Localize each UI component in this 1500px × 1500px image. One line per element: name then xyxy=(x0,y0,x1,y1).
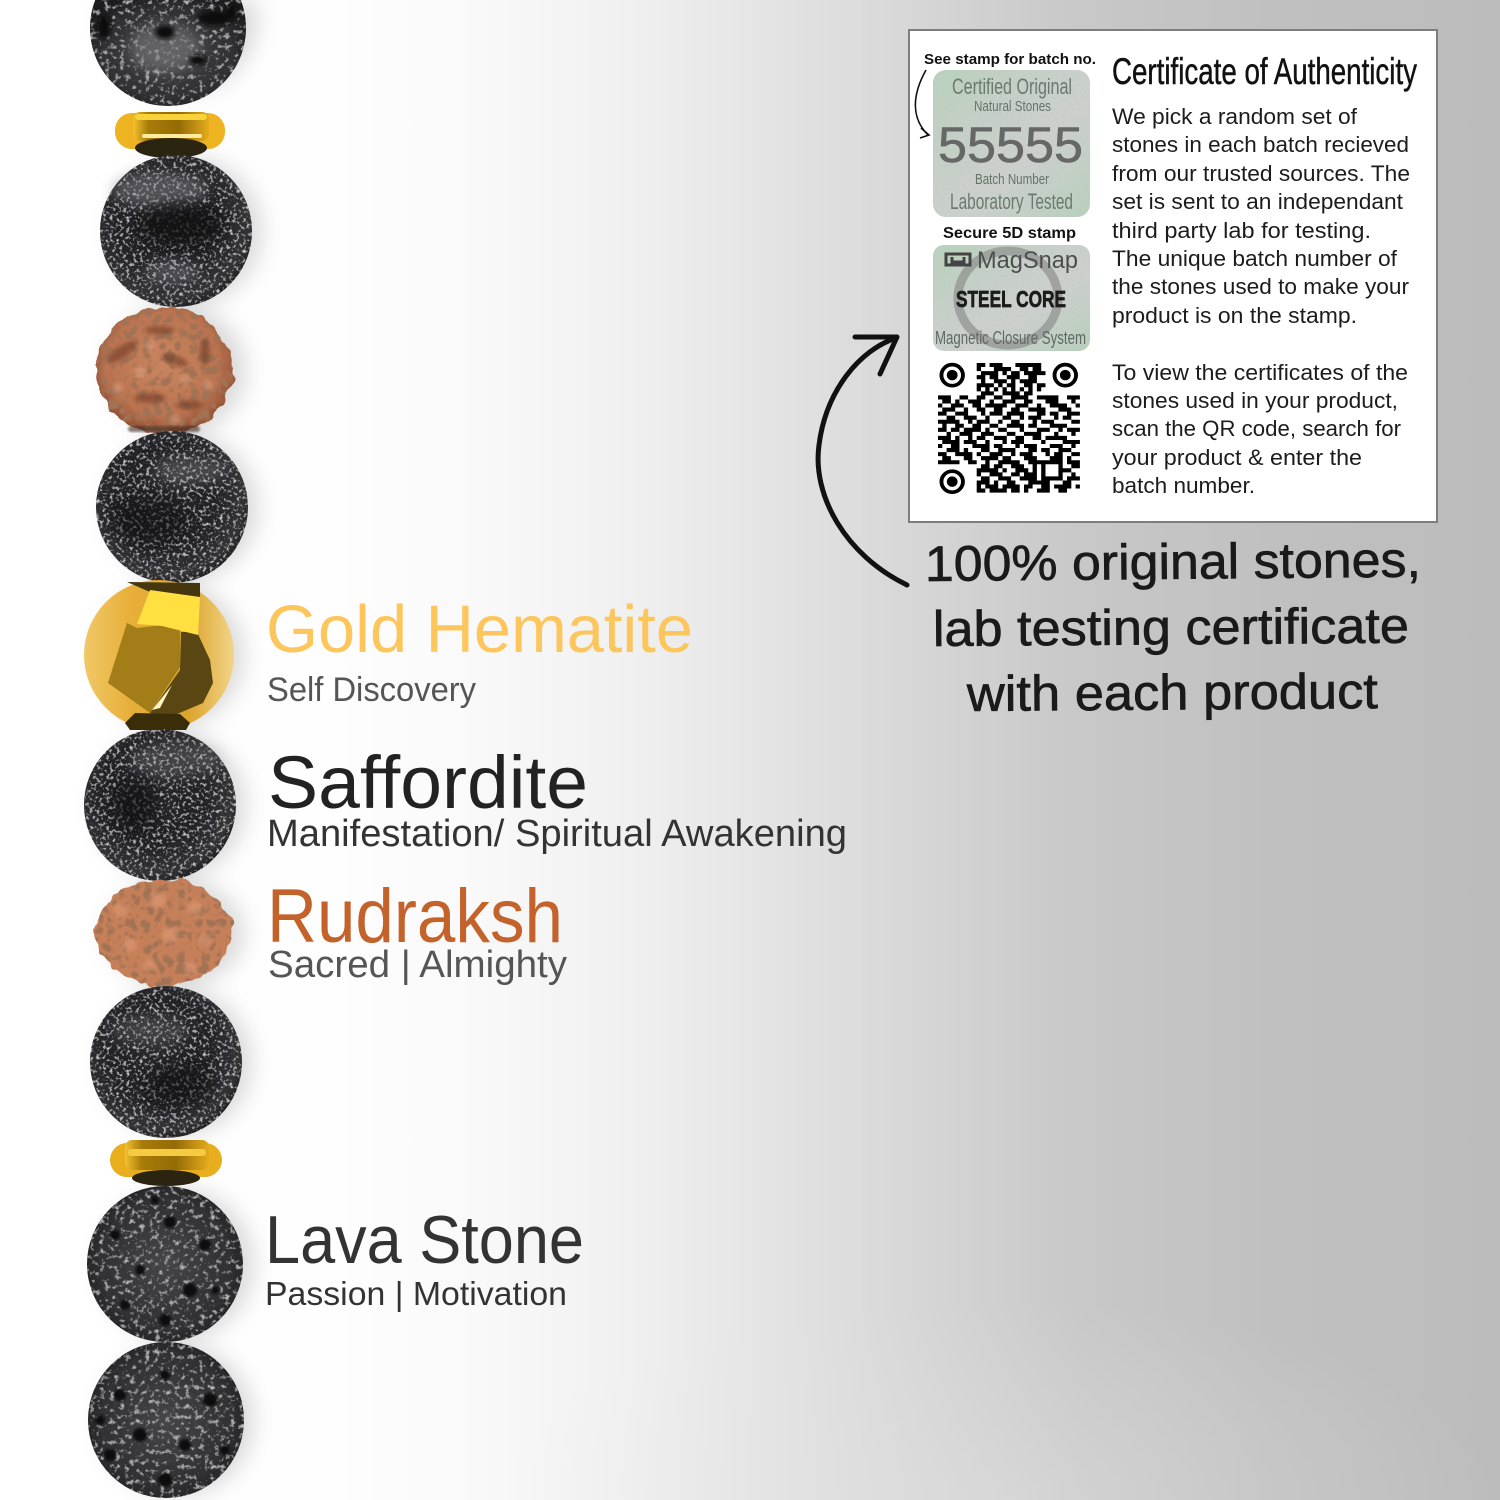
body text: testing process: The unique batch number of xyxy=(1112,246,1398,271)
body text: testing process: We pick a random set of xyxy=(1112,104,1358,129)
body text: testing process: the stones used to make your xyxy=(1112,274,1409,299)
label: gold hematite xyxy=(266,592,693,709)
panel: certificate card xyxy=(909,30,1437,522)
subtext: manifestation: Manifestation/ Spiritual Awakening xyxy=(267,813,847,855)
arrow: to certificate xyxy=(818,337,907,585)
heading: lava stone: Lava Stone xyxy=(265,1202,584,1278)
callout: original stones: with each product xyxy=(966,663,1378,722)
bead: saffordite 4 xyxy=(90,986,242,1138)
bead: saffordite 2 xyxy=(96,431,248,583)
body text: how to view: batch number. xyxy=(1112,473,1255,498)
stamp: batch number: Batch Number xyxy=(975,172,1049,188)
bead: saffordite 1 xyxy=(100,155,252,307)
body text: how to view: scan the QR code, search for xyxy=(1112,416,1401,441)
icon: small curved arrow xyxy=(915,70,929,138)
QR code xyxy=(938,365,1080,492)
stamp: batch number xyxy=(933,70,1090,217)
label: rudraksh xyxy=(267,874,567,986)
body text: testing process: set is sent to an independant xyxy=(1112,189,1403,214)
body text: testing process xyxy=(1112,104,1410,328)
bead: lava stone 2 xyxy=(87,1186,243,1342)
body text: how to view: To view the certificates of the xyxy=(1112,360,1408,385)
bead: lava stone 3 xyxy=(88,1342,244,1498)
bead: rudraksh 1 xyxy=(96,306,232,434)
stamp: batch number: 55555 xyxy=(938,117,1083,173)
subtext: sacred almighty: Sacred | Almighty xyxy=(268,944,567,986)
bead: rudraksh 2 xyxy=(96,879,232,987)
callout: original stones xyxy=(925,532,1421,722)
body text: how to view: your product & enter the xyxy=(1112,445,1362,470)
body text: testing process: stones in each batch recieved xyxy=(1112,132,1409,157)
label: lava stone xyxy=(265,1202,584,1312)
stamp caption: secure: Secure 5D stamp xyxy=(943,225,1076,242)
subtext: self discovery: Self Discovery xyxy=(267,671,476,709)
body text: testing process: third party lab for testing. xyxy=(1112,218,1371,243)
body text: how to view: stones used in your product, xyxy=(1112,388,1398,413)
stamp: magsnap steel core: MagSnap xyxy=(977,247,1078,274)
stamp: magsnap steel core: Magnetic Closure System xyxy=(935,328,1086,348)
body text: testing process: product is on the stamp. xyxy=(1112,303,1357,328)
callout: original stones: lab testing certificate xyxy=(933,598,1409,657)
heading: saffordite: Saffordite xyxy=(268,741,588,824)
bead: lava stone top xyxy=(90,0,246,106)
stamp caption: See stamp for batch no. xyxy=(924,52,1096,68)
bead strand xyxy=(84,0,252,1498)
stamp: batch number: Natural Stones xyxy=(974,99,1051,115)
body text: how to view xyxy=(1112,360,1408,498)
subtext: passion motivation: Passion | Motivation xyxy=(265,1275,567,1312)
bead: gold spacer bottom xyxy=(110,1140,222,1186)
body text: testing process: from our trusted sources. The xyxy=(1112,161,1410,186)
bead: gold hematite xyxy=(84,580,234,730)
bead shadows xyxy=(98,0,262,1496)
stamp: batch number: Laboratory Tested xyxy=(950,189,1073,214)
stamp: batch number: Certified Original xyxy=(952,74,1072,99)
stamp: magsnap steel core: STEEL CORE xyxy=(956,286,1066,312)
heading: rudraksh: Rudraksh xyxy=(267,874,563,959)
callout: original stones: 100% original stones, xyxy=(925,532,1421,592)
bead: gold spacer top xyxy=(115,112,225,158)
stamp: magsnap steel core xyxy=(933,245,1090,351)
label: saffordite xyxy=(267,741,847,855)
bead: saffordite 3 xyxy=(84,729,236,881)
heading: gold hematite: Gold Hematite xyxy=(266,592,693,667)
